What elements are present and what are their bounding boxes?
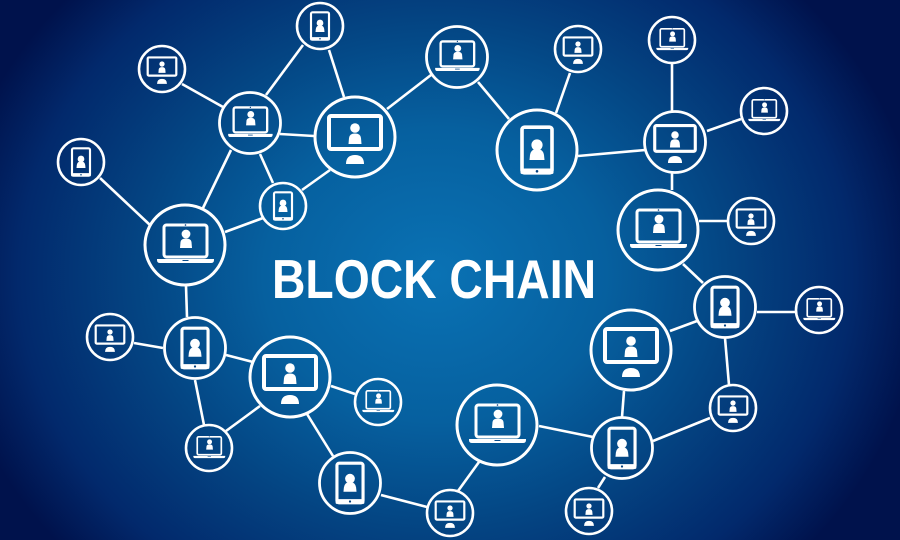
node: laptop upper left	[220, 92, 280, 154]
node: large desktop upper centre	[315, 97, 395, 177]
node: phone far left	[58, 139, 104, 185]
node: phone lower left	[164, 318, 226, 378]
node: phone lower right	[592, 418, 652, 478]
node: small phone centre left	[260, 183, 306, 229]
node: large laptop left	[145, 205, 225, 285]
node: small laptop lower centre	[355, 379, 401, 425]
node: laptop top right	[649, 17, 695, 63]
node: large laptop right	[618, 190, 698, 270]
node: desktop top	[555, 26, 601, 72]
node: laptop far right	[796, 287, 842, 333]
network connection lines	[100, 45, 795, 507]
node: small desktop lower right	[710, 385, 756, 431]
node: small laptop lower left	[186, 425, 232, 471]
node: phone right	[694, 276, 756, 338]
node: small desktop right	[728, 198, 774, 244]
node: small desktop bottom	[427, 490, 473, 536]
node: small desktop bottom right	[566, 488, 612, 534]
node: phone bottom	[320, 452, 380, 514]
node: laptop top centre	[426, 26, 488, 88]
node: desktop upper right	[644, 112, 706, 172]
node: large phone top centre	[497, 110, 577, 190]
node: large desktop lower right	[591, 310, 671, 390]
node: desktop upper left	[139, 46, 185, 92]
node: small desktop far lower left	[87, 314, 133, 360]
node: large desktop lower left	[250, 337, 330, 417]
node: laptop far upper right	[741, 88, 787, 134]
node: phone top	[297, 3, 343, 49]
node: large laptop bottom centre	[457, 385, 537, 465]
title: BLOCK CHAIN	[272, 248, 596, 310]
